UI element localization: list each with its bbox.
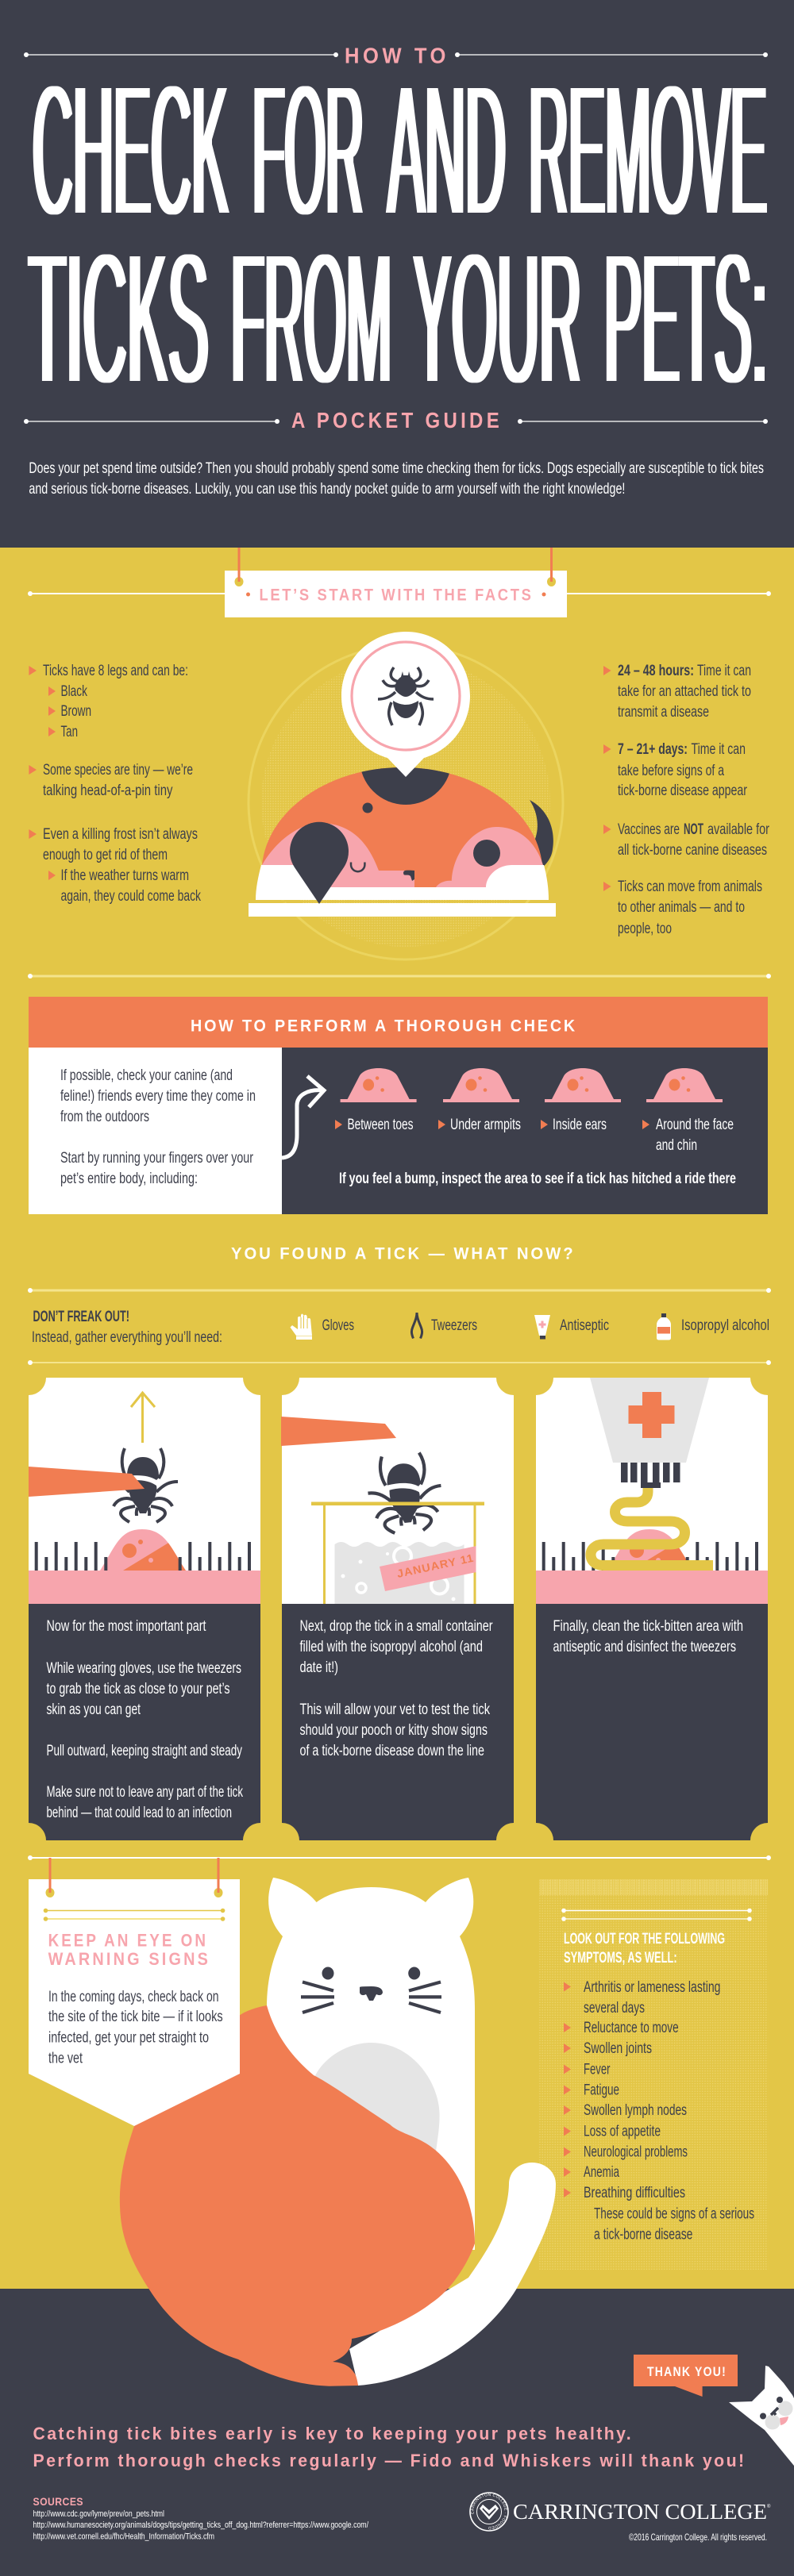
card text: should your pooch or kitty show signs: [300, 1722, 488, 1739]
heading: warning signs: KEEP AN EYE ON: [48, 1930, 208, 1951]
list: facts left: enough to get rid of them: [43, 847, 168, 863]
text: check instructions: [60, 1067, 256, 1187]
supplies row: [32, 1309, 769, 1346]
card 3: clean with antiseptic: [536, 1378, 768, 1840]
list: facts right: available for: [707, 821, 770, 838]
heading: warning signs: [48, 1930, 210, 1969]
bump labels: Under armpits: [450, 1117, 521, 1133]
card text: behind — that could lead to an infection: [46, 1805, 232, 1821]
dog ear: [290, 822, 349, 904]
dog head: [262, 823, 414, 887]
card text: Pull outward, keeping straight and steady: [46, 1743, 242, 1759]
list: facts right: 24 – 48 hours:: [618, 663, 694, 679]
supplies row: Instead, gather everything you’ll need:: [32, 1329, 222, 1346]
closing message: [33, 2424, 746, 2470]
icon: alcohol bottle: [657, 1313, 671, 1340]
bumps: [341, 1068, 723, 1102]
card text: Make sure not to leave any part of the tick: [46, 1784, 243, 1801]
bump labels: [335, 1117, 734, 1154]
list: symptoms: Swollen lymph nodes: [584, 2102, 687, 2119]
list: symptoms: Reluctance to move: [584, 2020, 679, 2036]
list: facts right: take for an attached tick to: [618, 683, 751, 700]
alcohol liquid: [335, 1542, 464, 1604]
text: warning signs: the site of the tick bite — if it looks: [48, 2009, 223, 2025]
closing message: Perform thorough checks regularly — Fido and Whiskers will thank you!: [33, 2451, 746, 2470]
panel: let's start with the facts: [28, 548, 771, 959]
text: check instructions: from the outdoors: [60, 1109, 149, 1125]
list: symptoms: Arthritis or lameness lasting: [584, 1979, 721, 1996]
logo: carrington college: CARRINGTON COLLEGE: [513, 2500, 767, 2524]
card text: Now for the most important part: [46, 1618, 206, 1635]
bump labels: and chin: [656, 1137, 697, 1154]
list: symptoms: Fever: [584, 2062, 611, 2078]
list: symptoms: several days: [584, 2000, 645, 2017]
closing message: Catching tick bites early is key to keeping your pets healthy.: [33, 2424, 633, 2443]
dog bed: [256, 865, 549, 900]
card text: This will allow your vet to test the tick: [300, 1701, 490, 1718]
banner: facts heading: LET’S START WITH THE FACTS: [259, 586, 534, 605]
date label: [380, 1546, 476, 1591]
list: facts left: Even a killing frost isn’t always: [43, 826, 198, 843]
text: warning signs: [48, 1989, 223, 2067]
text: check instructions: pet’s entire body, including:: [60, 1171, 198, 1187]
list: symptoms: Breathing difficulties: [584, 2185, 685, 2201]
card text: to grab the tick as close to your pet’s: [46, 1681, 230, 1697]
icon: peeking kitten: [729, 2366, 794, 2466]
heading: warning signs: WARNING SIGNS: [48, 1949, 210, 1969]
text: check instructions: feline!) friends every time they come in: [60, 1088, 256, 1105]
bump labels: Around the face: [656, 1117, 734, 1133]
list: facts right: Time it can: [697, 663, 751, 679]
list: facts right: [603, 663, 770, 937]
icon: college seal: CARRINGTON COLLEGE · FOUNDED 1967: [471, 2493, 507, 2530]
title: PETS:: [604, 213, 767, 424]
text: check instructions: If possible, check your canine (and: [60, 1067, 233, 1084]
heading: you found a tick: YOU FOUND A TICK — WHAT NOW?: [231, 1244, 575, 1263]
card text: [300, 1618, 493, 1759]
card text: date it!): [300, 1659, 338, 1676]
illustration: sleeping dog with tick pin: [249, 632, 563, 959]
card text: Finally, clean the tick-bitten area with: [553, 1618, 743, 1635]
list: facts left: Brown: [60, 703, 91, 720]
sources: http://www.vet.cornell.edu/fhc/Health_Information/Ticks.cfm: [33, 2532, 214, 2541]
list: facts left: talking head-of-a-pin tiny: [43, 782, 173, 799]
tick: [364, 1451, 445, 1536]
panel: header: [0, 0, 794, 548]
bump labels: Inside ears: [553, 1117, 607, 1133]
list: facts left: If the weather turns warm: [60, 867, 189, 884]
supplies row: Tweezers: [431, 1317, 477, 1334]
list: symptoms: a tick-borne disease: [594, 2227, 692, 2243]
icon: gloves: [291, 1314, 312, 1340]
title: CHECK: [33, 45, 229, 256]
tweezers: [29, 1467, 145, 1497]
heading: thorough check: HOW TO PERFORM A THOROUGH CHECK: [191, 1017, 577, 1035]
ointment squeeze: [591, 1488, 713, 1565]
icon: antiseptic tube: [534, 1315, 550, 1340]
sources: http://www.cdc.gov/lyme/prev/on_pets.html: [33, 2509, 164, 2519]
supplies row: DON’T FREAK OUT!: [33, 1309, 129, 1325]
antiseptic tube: [590, 1378, 709, 1488]
list: facts right: to other animals — and to: [618, 899, 745, 916]
card text: [46, 1618, 243, 1821]
cat belly: [314, 2043, 440, 2159]
list: facts right: Time it can: [691, 741, 746, 758]
speech bubble: thank you: THANK YOU!: [647, 2364, 727, 2379]
bump labels: Between toes: [348, 1117, 413, 1133]
dog body: [262, 767, 542, 887]
list: symptoms: Swollen joints: [584, 2040, 652, 2057]
jar: [324, 1505, 475, 1604]
panel: symptoms: [539, 1879, 769, 2270]
card text: skin as you can get: [46, 1701, 141, 1718]
sources: http://www.humanesociety.org/animals/dogs/tips/getting_ticks_off_dog.html?referrer=https://www.google.com/: [33, 2520, 369, 2530]
list: facts right: transmit a disease: [618, 704, 709, 721]
list: symptoms: Fatigue: [584, 2082, 619, 2098]
pin with tick: [341, 632, 470, 777]
list: facts left: Black: [60, 683, 87, 700]
banner: keep an eye on warning signs: [29, 1858, 240, 2126]
card text: While wearing gloves, use the tweezers: [46, 1660, 241, 1677]
title: AND: [387, 45, 506, 256]
list: facts left: [29, 663, 201, 905]
intro text: [29, 460, 764, 498]
cat tail: [349, 2163, 556, 2386]
text: warning signs: infected, get your pet straight to: [48, 2030, 209, 2046]
list: facts left: Ticks have 8 legs and can be:: [43, 663, 188, 679]
arrow: curved white: [282, 1076, 324, 1158]
text: warning signs: In the coming days, check back on: [48, 1989, 219, 2005]
speech bubble: thank you: [634, 2355, 738, 2397]
card text: Next, drop the tick in a small container: [300, 1618, 493, 1635]
panel: footer background: [0, 2289, 794, 2576]
cat orange patch: [120, 2005, 475, 2386]
heading: symptoms: SYMPTOMS, AS WELL:: [564, 1950, 677, 1967]
tweezers: [281, 1417, 396, 1446]
list: symptoms: Loss of appetite: [584, 2124, 661, 2140]
sources: [33, 2495, 369, 2541]
cat face: [301, 1967, 441, 2013]
supplies row: Gloves: [322, 1317, 354, 1334]
heading: a pocket guide: A POCKET GUIDE: [291, 408, 503, 433]
text: check instructions: Start by running your fingers over your: [60, 1150, 253, 1167]
card text: antiseptic and disinfect the tweezers: [553, 1639, 736, 1655]
list: symptoms: [564, 1979, 754, 2243]
heading: symptoms: [564, 1931, 725, 1967]
list: facts right: people, too: [618, 921, 672, 937]
dog tail: [530, 800, 553, 867]
panel: how to perform a thorough check: [29, 997, 768, 1214]
illustration: big white cat with orange patch: [120, 1878, 556, 2386]
list: symptoms: Anemia: [584, 2164, 619, 2181]
tick: [108, 1448, 178, 1522]
card text: filled with the isopropyl alcohol (and: [300, 1639, 483, 1655]
card 2: drop in container: [281, 1378, 514, 1840]
supplies row: Antiseptic: [560, 1317, 609, 1334]
title: TICKS: [29, 213, 209, 424]
list: facts left: Tan: [60, 724, 78, 740]
title: YOUR: [413, 213, 581, 424]
sources: SOURCES: [33, 2495, 83, 2508]
dog hind leg: [436, 827, 543, 887]
list: facts right: Vaccines are: [618, 821, 680, 838]
banner: facts heading: [225, 548, 567, 617]
cat body and head: [267, 1878, 475, 2250]
text: warning signs: the vet: [48, 2051, 83, 2067]
supplies row: Isopropyl alcohol: [681, 1317, 769, 1334]
heading: how to: HOW TO: [345, 43, 449, 68]
list: facts left: again, they could come back: [60, 888, 201, 905]
title: [27, 45, 767, 424]
list: facts right: NOT: [684, 821, 703, 838]
logo: carrington college: ®: [767, 2504, 771, 2509]
list: facts right: tick-borne disease appear: [618, 782, 747, 799]
list: facts right: take before signs of a: [618, 763, 724, 779]
card text: of a tick-borne disease down the line: [300, 1743, 484, 1759]
arrow: pull upward: [131, 1393, 155, 1443]
card 1: remove the tick: [29, 1378, 260, 1840]
icon: college seal: [469, 2492, 509, 2532]
icon: tweezers: [411, 1313, 422, 1338]
card text: [553, 1618, 743, 1655]
title: REMOVE: [529, 45, 767, 256]
list: facts right: 7 – 21+ days:: [618, 741, 688, 758]
title: FOR: [252, 45, 364, 256]
date label: JANUARY 11: [395, 1551, 475, 1580]
title: FROM: [231, 213, 391, 424]
list: symptoms: Neurological problems: [584, 2144, 688, 2160]
list: facts left: Some species are tiny — we’re: [43, 762, 193, 779]
